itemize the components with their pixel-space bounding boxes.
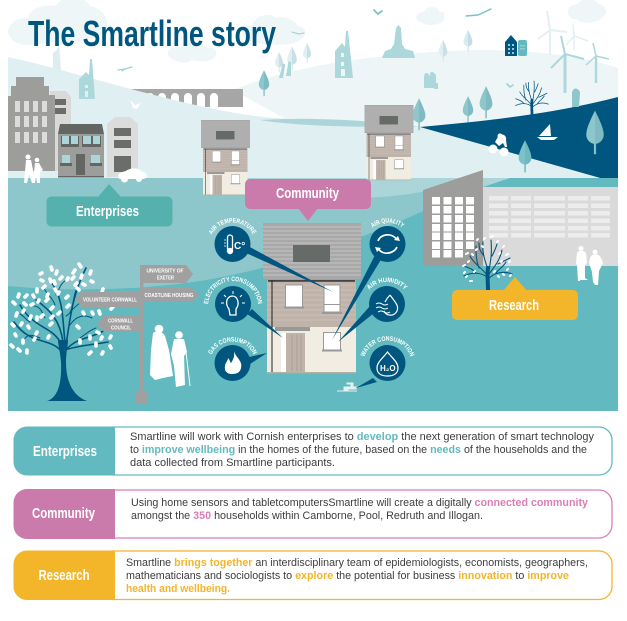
icon: air quality: AIR QUALITY [371,218,405,228]
label: Enterprises [46,184,172,226]
panel: Research description: mathematicians and sociologists to explore the potential for business innovation to improve [126,570,569,582]
icon: large tree [11,264,113,401]
sensor pointers [246,246,382,388]
label: Research: Research [489,297,539,314]
signpost [75,265,199,404]
icon: walking people [24,154,43,183]
icon: teal mine tower left [79,59,95,99]
sign: Coastline Housing: COASTLINE HOUSING [144,293,194,299]
icon: small figures on hill [279,62,580,107]
icon: white bird [130,100,141,109]
icon: gas consumption: GAS CONSUMPTION [208,337,258,354]
sign: University of Exeter: UNIVERSITY OF [146,268,184,274]
icon: water consumption [360,336,414,381]
building: research centre [423,170,618,266]
sign: University of Exeter: EXETER [157,276,175,282]
icon: air humidity [367,278,408,322]
label: Research [452,277,578,320]
icon: viaduct [125,89,243,107]
icon: garden tap [337,383,357,391]
sign: Cornwall Council: COUNCIL [111,326,131,332]
sign: Cornwall Council: CORNWALL [108,318,133,324]
panel: Enterprises description: Enterprises [33,443,97,460]
icon: wind turbines [538,11,609,93]
icon: electricity consumption: ELECTRICITY CONSUMPTION [204,276,262,304]
hill band [260,119,420,127]
building: tall light house [107,117,138,177]
panel: Enterprises description: to improve wellbeing in the homes of the future, based on the needs of the households and the [130,444,587,456]
icon: sailboat [537,124,558,140]
icon: air temperature: C° [234,241,245,252]
panel: Community description [14,489,612,539]
icon: research people [576,246,603,285]
icon: research tree [463,236,512,290]
building: upper house right [364,105,414,180]
icon: bare tree on hill [516,81,548,115]
icon: teal mine tower right [335,31,353,78]
hill: right back hill [233,50,618,127]
sign: University of Exeter [143,265,193,283]
icon: elderly couple [150,325,190,387]
background trees [259,30,604,172]
panel: Research description: Research [38,567,90,584]
panel: Research description [14,550,612,600]
sign: Volunteer Cornwall: VOLUNTEER CORNWALL [83,298,137,304]
clouds [8,0,606,62]
icon: lighthouse monument [382,25,415,58]
building: grey apartment block [8,77,71,171]
icon: water consumption: WATER CONSUMPTION [360,336,414,356]
icon: air humidity: AIR HUMIDITY [367,278,408,290]
panel: Community description: Community [32,505,96,522]
icon: air quality [370,218,406,262]
hill: front left hill [8,57,618,183]
icon: gas consumption [208,337,258,381]
panel: Research description: health and wellbeing. [126,583,230,595]
ground [200,178,510,198]
panel: central sensor house [263,223,361,374]
icon: birds [118,9,513,87]
icon: electricity consumption [204,276,262,322]
label: Enterprises: Enterprises [76,203,139,220]
panel: Enterprises description: Smartline will work with Cornish enterprises to develop the next generation of smart technology [130,431,594,443]
panel: Community description: amongst the 350 households within Camborne, Pool, Redruth and Illogan. [131,510,483,522]
title: The Smartline story [28,13,276,54]
sign: Cornwall Council [97,316,140,332]
label: Community: Community [276,185,340,202]
panel: Enterprises description: data collected from Smartline participants. [130,457,335,469]
icon: harbour houses [505,35,527,56]
panel: Research description: Smartline brings together an interdisciplinary team of epidemiologists, economists, geographers, [126,557,588,569]
dark blue wedge [420,97,618,183]
building: upper house left [201,120,250,195]
label: Community [245,179,371,221]
icon: pale mine tower [53,44,61,70]
panel: Enterprises description [14,426,612,476]
icon: car [118,168,147,183]
icon: water consumption: H₂O [380,364,396,373]
icon: air temperature [208,218,257,262]
icon: cyclist [488,134,508,156]
building: grey terraced house [58,124,104,178]
panel: Community description: Using home sensors and tabletcomputersSmartline will create a digitally connected community [131,497,589,509]
icon: air temperature: AIR TEMPERATURE [208,218,257,234]
